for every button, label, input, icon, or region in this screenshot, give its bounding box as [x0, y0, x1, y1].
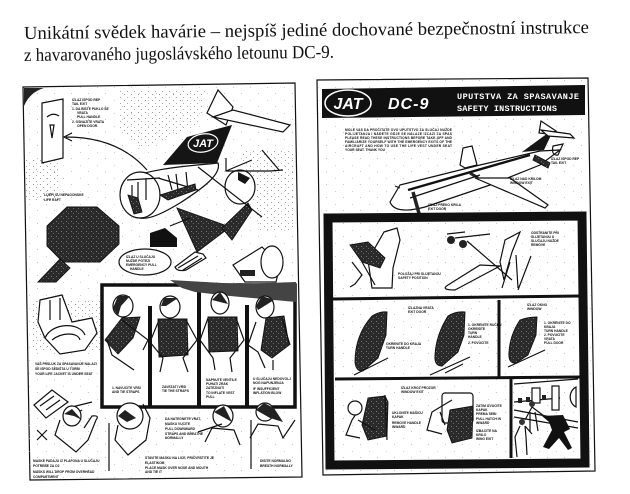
text: remove items: REMOVE [531, 243, 546, 247]
illustration: passenger in brace position [350, 228, 400, 288]
text: oxygen mask instructions [33, 458, 100, 479]
panel: alternate exit [508, 303, 571, 367]
text: mask pull instructions [145, 417, 215, 474]
illustration: oxygen cone [233, 246, 283, 282]
step 2: tie straps: ZAVEZATI VRSI [162, 385, 186, 389]
text: alternate steps: 1. OKRENITE DO [544, 321, 571, 325]
arrow: to tail exit [64, 133, 147, 170]
text: life vest location: VAŠ PRSLUK ZA SPASAVANJE NALAZI [35, 361, 97, 366]
text: door step two: 1. OKRENITE RUČKU [468, 322, 502, 327]
text: intro paragraph: AIRCRAFT AND HOW TO USE THE LIFE VEST UNDER SEAT [345, 144, 452, 148]
callout: raft instructions [119, 249, 171, 275]
aircraft exit labels: WINDOW EXIT [510, 181, 533, 185]
heading: DC-9: DC-9 [388, 96, 429, 113]
text: window step one [392, 410, 423, 429]
panel: window exit [346, 386, 503, 443]
text: intro paragraph: YOUR SEAT. THANK YOU [345, 148, 386, 152]
logo: JAT [325, 90, 371, 116]
text: alternate steps: KRAJA [544, 325, 556, 329]
text: tail exit instructions: 1. DA BISTE PUKLO SE [72, 107, 109, 111]
text: door step two: HANDLE [468, 335, 483, 339]
illustration: woman [525, 401, 544, 432]
text: oxygen mask instructions: MASKS WILL DROP FROM OVERHEAD [33, 470, 95, 474]
divider: vertical rule [109, 420, 251, 471]
text: tail exit instructions: TAIL EXIT [72, 102, 87, 106]
step 4: blow into tube: IF INSUFFICIENT [253, 387, 280, 391]
illustration: passenger fitting mask [115, 403, 150, 455]
step 3: inflate vest [200, 292, 244, 399]
illustration: overhead oxygen compartment and passenger [34, 390, 97, 452]
text: brace label: SAFETY POSITION [398, 276, 428, 280]
text: life raft label [44, 193, 84, 202]
sheet frame [23, 83, 302, 480]
sheet frame [317, 78, 595, 475]
illustration: open window hatch [427, 393, 473, 443]
text: intro paragraph [345, 127, 453, 152]
text: tail exit instructions: OPEN DOOR [77, 124, 98, 128]
step 4: blow into tube [248, 296, 291, 395]
text: window step two: ZATIM IZVUCITE [476, 404, 503, 408]
text: life vest location: SE ISPOD SEDIŠTA U TORBI [35, 366, 80, 371]
heading: safety instructions [457, 92, 579, 114]
step 4: blow into tube: NOG NAPUNJENJA [253, 381, 284, 385]
text: remove items [531, 231, 560, 247]
text: window step two: IZBACITE NA [476, 429, 497, 433]
callout: raft instructions: EMERGENCY PULL [126, 263, 157, 267]
illustration: seat with life vest [38, 295, 97, 354]
text: window step one: KAPAK [392, 415, 404, 419]
text: alternate steps [544, 321, 571, 345]
aircraft exit labels [428, 157, 580, 211]
title: Unikátní svědek havárie – nejspíš jediné dochované bezpečnostní instrukce [24, 17, 589, 43]
text: tail exit instructions: VRATA [77, 111, 88, 115]
icon: black bag [150, 228, 177, 247]
illustration: aircraft tail cutaway [120, 90, 290, 218]
text: mask pull instructions: DA NATEGNETE VRAT, [165, 417, 201, 421]
text: door step two: OKRENITE [468, 327, 486, 331]
text: oxygen mask instructions: POTREBE ZA O2 [33, 464, 60, 468]
text: tail exit instructions: PULL HANDLE [77, 115, 101, 119]
aircraft exit labels: IZLAZ PREKO KRILA [428, 203, 462, 207]
panel: brace position and items to remove [350, 228, 560, 290]
illustration: DC-9 aircraft [390, 121, 574, 217]
step 3: inflate vest: ZATEZNUTI [206, 386, 224, 390]
text: life raft label: LIJEPI SU NEPAGONSKE [44, 193, 84, 197]
title: z havarovaného jugoslávského letounu DC-9. [24, 42, 334, 65]
title [24, 17, 589, 65]
text: door step one: TURN HANDLE [386, 346, 411, 350]
aircraft exit labels: TAIL EXIT [551, 161, 566, 165]
logo: JAT on tail [187, 132, 219, 154]
arrow: floor lines [430, 357, 470, 375]
text: alternate steps: VRATA [544, 337, 555, 341]
panel: right safety instruction sheet [317, 78, 595, 475]
step 2: tie straps: TIE THE STRAPS [162, 389, 190, 393]
text: tail exit instructions: IZLAZ ISPOD REP [72, 98, 101, 102]
panel: door exit [354, 306, 502, 375]
step 3: inflate vest: TO INFLATE VEST [206, 391, 235, 395]
arrow: floor line [354, 358, 388, 375]
text: life vest location [35, 361, 97, 376]
text: door step two: TURN [468, 331, 478, 335]
step 4: blow into tube: INFLATION BLOW [253, 391, 282, 395]
illustration: seated passenger [170, 150, 283, 271]
text: alternate steps: PULL DOOR [544, 341, 564, 345]
panel: left safety instruction sheet [23, 83, 302, 480]
text: life vest location: YOUR LIFE JACKET IS UNDER SEAT [35, 372, 93, 376]
icon: tail exit ring [553, 144, 563, 155]
text: window exit heading: WINDOW EXIT [401, 390, 424, 394]
logo: JAT on tail: JAT [193, 138, 214, 150]
callout: raft instructions: IZLAZ U SLUČAJU [126, 254, 156, 259]
text: window step two: PULL HATCH IN [476, 417, 502, 421]
text: mask pull instructions: PLACE MASK OVER NOSE AND MOUTH [145, 466, 209, 470]
text: mask pull instructions: AND TIE IT [145, 470, 162, 474]
text: alternate exit heading: IZLAZ OKNO [527, 303, 548, 307]
text: window exit heading: IZLAZ KROZ PROZOR [401, 386, 436, 390]
text: door exit heading: IZLAZNA VRATA [408, 306, 434, 310]
text: mask pull instructions: ELASTIKOM [145, 461, 165, 465]
text: door exit heading [408, 306, 434, 314]
illustration: glasses, shoes and pens [445, 232, 531, 290]
text: intro paragraph: POLIJETANJA I NAĐETE GDJE SE NALAZE IZLAZI ZA SPAS [345, 132, 453, 136]
text: life raft label: LIFE RAFT [44, 198, 61, 202]
panel: life vest steps [102, 280, 296, 407]
arrow: floor line [508, 350, 545, 367]
text: alternate exit heading: WINDOW [527, 307, 542, 311]
logo: JAT: JAT [333, 96, 364, 113]
text: intro paragraph: MOLE VAS DA PROČITATE OVO UPUTSTVO ZA SLUČAJ NUŽDE [345, 127, 453, 132]
step 2: tie straps [150, 296, 197, 393]
text: remove items: ODSTRANITE PRI [531, 231, 559, 235]
illustration: life raft [38, 207, 119, 282]
text: breathing normally [260, 459, 294, 468]
text: door step two: 2. POVUCITE [468, 341, 489, 345]
text: mask pull instructions: PULL DOWNWARD [165, 427, 196, 431]
text: oxygen mask instructions: COMPARTMENT [33, 475, 59, 479]
text: alternate steps: TURN HANDLE [544, 329, 569, 333]
text: window step one: UKLONITE MAŠICU [392, 410, 423, 415]
text: remove items: SLIJETANJU U [531, 235, 555, 239]
aircraft exit labels: EXIT DOOR [428, 207, 447, 211]
panel: evacuation scene [514, 379, 578, 457]
step 1: put on vest: AND TIE STRAPS [112, 390, 140, 394]
text: window step one: REMOVE HANDLE [392, 421, 422, 425]
aircraft exit labels: IZLAZ ISPOD REP [551, 157, 580, 161]
text: breathing normally: BREATH NORMALLY [260, 464, 294, 468]
text: window step one: INWARD [392, 425, 406, 429]
text: mask pull instructions: MASKU VUCITE [165, 422, 191, 426]
step 3: inflate vest: PUHATI ZRAK [206, 382, 229, 386]
text: window step two [476, 404, 503, 441]
illustration: child [515, 419, 532, 457]
text: window exit heading [401, 386, 436, 394]
panel: instruction grid [328, 216, 585, 465]
text: oxygen mask instructions: MASKE PADAJU IZ PLAFONA U SLUČAJU [33, 458, 100, 463]
heading: safety instructions: UPUTSTVA ZA SPASAVANJE [457, 92, 579, 102]
step 1: put on vest: 1. NAVUCITE VRSI [112, 386, 141, 390]
text: intro paragraph: PLEASE READ THESE INSTRUCTIONS BEFORE TAKE-OFF AND [345, 136, 453, 140]
icon: door open [435, 312, 465, 366]
text: window step two: WING EXIT [476, 437, 493, 441]
illustration: person removing window hatch [346, 395, 388, 440]
heading: safety instructions: SAFETY INSTRUCTIONS [457, 104, 557, 114]
icon: door closed [355, 312, 387, 371]
text: intro paragraph: FAMILIARIZE YOURSELF WITH THE EMERGENCY EXITS OF THE [345, 140, 453, 144]
text: alternate steps: 2. POVUCITE [544, 333, 565, 337]
text: window step two: INWARD [476, 421, 490, 425]
text: tail exit instructions [72, 98, 109, 128]
text: mask pull instructions: STAVITE MASKU NA LICE, PRIČVRSTITE JE [145, 455, 215, 460]
aircraft exit labels: IZLAZ NAD KRILOM [510, 177, 542, 181]
icon: tail exit door [42, 99, 63, 163]
text: mask pull instructions: STRAPS AND BREATHE [165, 432, 204, 436]
text: window step two: PREMA SEBI [476, 412, 496, 416]
step 3: inflate vest: NAPNUTE VENTILE [206, 378, 238, 382]
text: brace label [398, 271, 441, 280]
icon: alternate door [509, 317, 537, 363]
text: mask pull instructions: NORMALLY [165, 436, 184, 440]
text: door exit heading: EXIT DOOR [408, 310, 427, 314]
callout: raft instructions: NUŽDE POTEZI [126, 258, 150, 263]
callout: raft instructions: HANDLE [130, 267, 145, 271]
text: door step two [468, 322, 502, 345]
text: alternate exit heading [527, 303, 548, 311]
illustration: passengers wearing masks [198, 403, 295, 445]
illustration: running man [542, 415, 572, 450]
step 1: put on vest [105, 295, 148, 394]
text: window step two: KAPAK [476, 408, 488, 412]
header band [322, 85, 585, 118]
step 3: inflate vest: PULL [206, 395, 215, 399]
text: door step one [386, 342, 422, 350]
text: breathing normally: DISITE NORMALNO [260, 459, 291, 463]
text: brace label: POLOŽAJ PRI SLIJETANJU [398, 271, 441, 276]
text: tail exit instructions: 2. OSNAZITE VRATA [72, 120, 105, 124]
step 4: blow into tube: U SLUČAJU NEDOVOLJ [253, 376, 291, 381]
text: door step one: OKRENITE DO KRAJA [386, 342, 422, 346]
text: remove items: SLUČAJU NUŽDE [531, 238, 560, 243]
text: window step two: KRILO [476, 433, 487, 437]
